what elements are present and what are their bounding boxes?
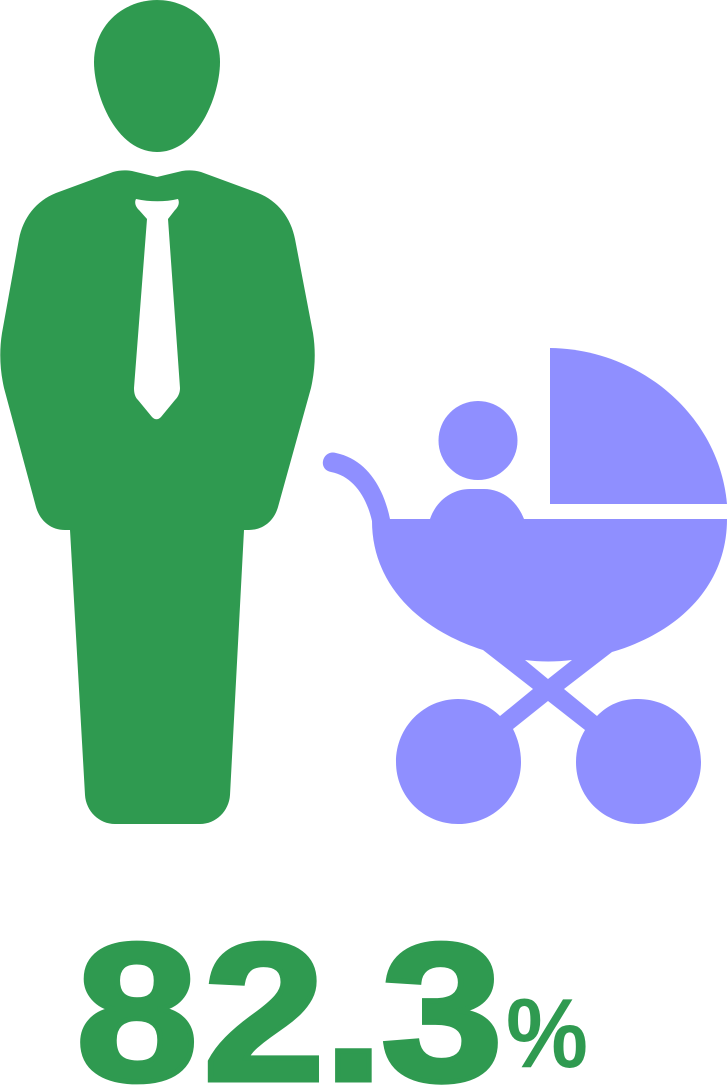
stroller hood (550, 348, 727, 504)
icon: baby stroller (323, 348, 727, 824)
baby body and basket (323, 452, 727, 824)
icon: necktie (134, 199, 180, 419)
gap between the stroller legs (525, 660, 572, 679)
baby head (438, 401, 518, 480)
percentage value: % (506, 978, 588, 1085)
percentage value (76, 903, 588, 1085)
icon: businessman (0, 0, 315, 824)
